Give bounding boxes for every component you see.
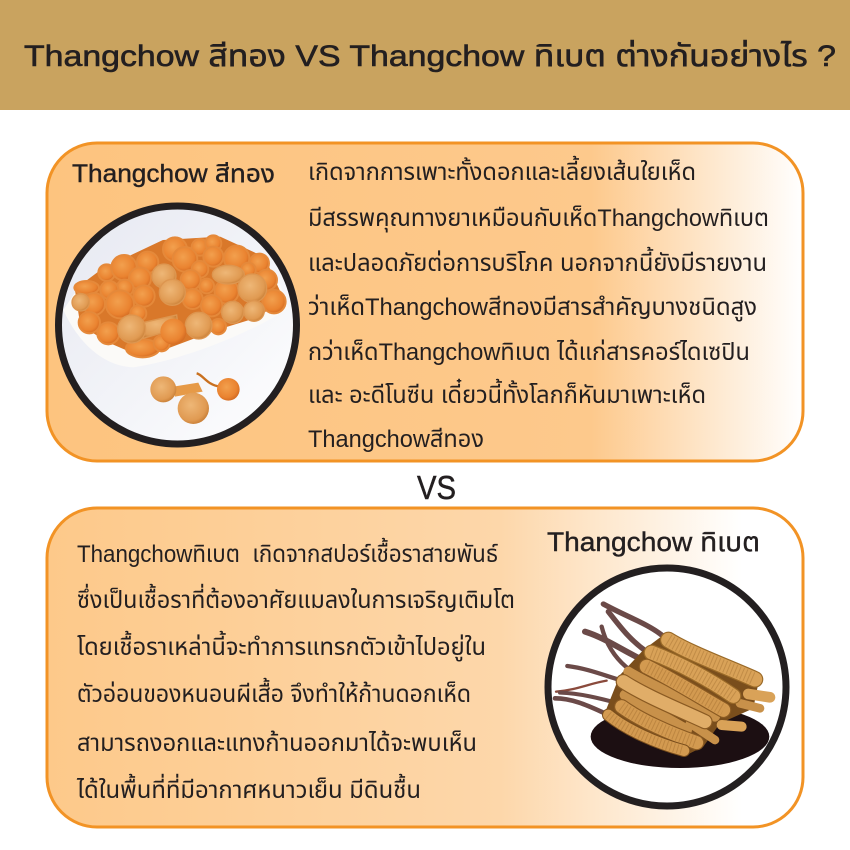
body text: ซึ่งเป็นเชื้อราที่ต้องอาศัยแมลงในการเจริญเติมโต <box>77 583 515 614</box>
body text <box>76 537 515 804</box>
panel background <box>47 508 803 827</box>
panel background <box>47 143 803 461</box>
title: Thangchow สีทอง VS Thangchow ทิเบต ต่างกันอย่างไร ? <box>24 40 836 73</box>
VS label: VS <box>417 469 456 506</box>
body text: สามารถงอกและแทงก้านออกมาได้จะพบเห็น <box>77 729 477 757</box>
body text: มีสรรพคุณทางยาเหมือนกับเห็ดThangchowทิเบต <box>308 204 769 233</box>
body text: Thangchowสีทอง <box>308 426 484 453</box>
header banner <box>0 0 850 110</box>
body text: และ อะดีโนซีน เดี๋ยวนี้ทั้งโลกก็หันมาเพาะเห็ด <box>308 378 706 409</box>
panel heading: Thangchow ทิเบต <box>547 527 760 557</box>
body text: ตัวอ่อนของหนอนผีเสื้อ จึงทำให้ก้านดอกเห็ด <box>77 677 471 708</box>
body text: โดยเชื้อราเหล่านี้จะทำการแทรกตัวเข้าไปอยู่ใน <box>77 630 486 662</box>
panel: Tibetan Thangchow <box>47 508 803 827</box>
panel: golden Thangchow <box>47 143 803 461</box>
small mushrooms on the table <box>150 373 240 424</box>
panel heading: Thangchow สีทอง <box>72 160 275 188</box>
photo: cordyceps on black plate <box>548 568 786 806</box>
body text: กว่าเห็ดThangchowทิเบต ได้แก่สารคอร์ไดเซปิน <box>308 338 750 366</box>
body text: ว่าเห็ดThangchowสีทองมีสารสำคัญบางชนิดสูง <box>308 293 757 322</box>
body text <box>308 155 769 453</box>
body text: Thangchowทิเบต เกิดจากสปอร์เชื้อราสายพันธ์ <box>77 537 498 568</box>
body text: ได้ในพื้นที่ที่มีอากาศหนาวเย็น มีดินชื้น <box>76 773 421 804</box>
photo: golden mushrooms in white dish <box>58 206 296 444</box>
body text: เกิดจากการเพาะทั้งดอกและเลี้ยงเส้นใยเห็ด <box>308 155 696 186</box>
body text: และปลอดภัยต่อการบริโภค นอกจากนี้ยังมีรายงาน <box>308 246 767 277</box>
